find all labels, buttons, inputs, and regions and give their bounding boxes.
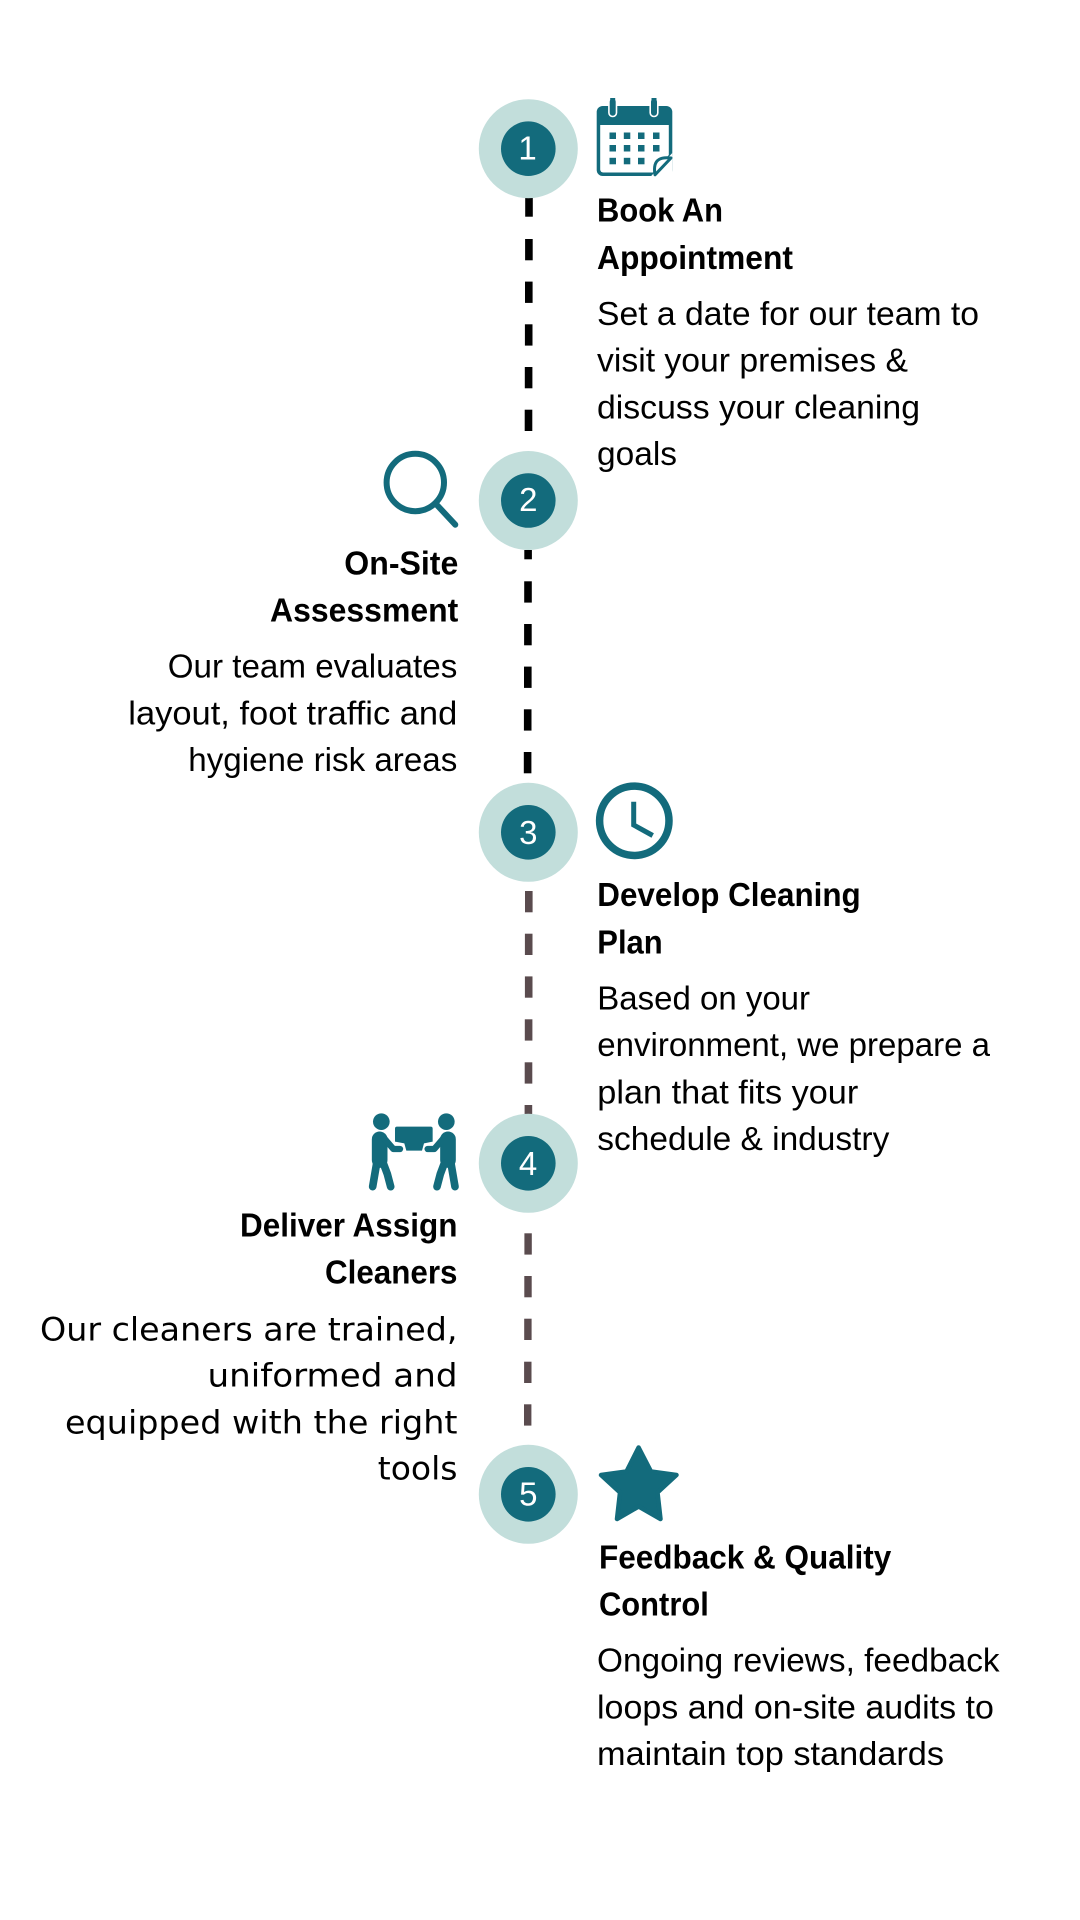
step 1 heading: [597, 192, 793, 276]
step 3 description: environment, we prepare a: [597, 1027, 990, 1064]
step 3 description: schedule & industry: [597, 1121, 890, 1158]
step 3 description: [597, 980, 990, 1158]
step 5 number badge: 5: [519, 1476, 537, 1513]
step 5 description: loops and on-site audits to: [597, 1689, 994, 1726]
step 3 description: Based on your: [597, 980, 810, 1017]
step 4 description: uniformed and: [208, 1357, 458, 1395]
step 5 description: [597, 1643, 1000, 1773]
step 2 heading: Assessment: [270, 592, 458, 629]
step 1 number badge: 1: [518, 130, 537, 166]
step 2 description: layout, foot traffic and: [128, 695, 457, 732]
step 4 description: equipped with the right: [65, 1403, 458, 1441]
icon: magnifying glass: [387, 454, 455, 525]
step 2 heading: [270, 544, 458, 629]
icon: calendar: [597, 98, 672, 176]
icon: clock: [600, 786, 669, 856]
dashed connector: step 3 to 4: [525, 891, 533, 1115]
step 1 heading: Appointment: [597, 239, 793, 276]
step 3 number badge: [479, 783, 578, 882]
step 3 heading: Plan: [597, 923, 663, 960]
step 2 number badge: 2: [519, 481, 537, 518]
step 4 heading: Deliver Assign: [240, 1207, 458, 1244]
icon: two people carrying box: [373, 1113, 455, 1187]
step 4 description: [40, 1311, 458, 1487]
step 4 number badge: 4: [519, 1145, 537, 1182]
dashed connector: step 1 to 2: [525, 198, 533, 431]
step 3 description: plan that fits your: [597, 1074, 858, 1111]
step 2 description: hygiene risk areas: [188, 742, 457, 779]
step 1 number badge: [479, 99, 578, 198]
step 5 heading: Feedback & Quality: [599, 1538, 892, 1575]
step 4 heading: Cleaners: [325, 1253, 458, 1290]
step 5 heading: [599, 1538, 892, 1623]
step 5 description: maintain top standards: [597, 1736, 944, 1773]
step 3 heading: [597, 876, 861, 960]
step 1 description: Set a date for our team to: [597, 296, 979, 333]
step 1 description: [597, 296, 979, 473]
step 2 description: Our team evaluates: [168, 649, 457, 686]
step 1 description: visit your premises &: [597, 343, 908, 380]
step 5 number badge: [479, 1445, 578, 1544]
dashed connector: step 2 to 3: [524, 550, 532, 773]
step 1 heading: Book An: [597, 192, 723, 229]
step 3 number badge: 3: [519, 814, 537, 851]
step 4 description: Our cleaners are trained,: [40, 1311, 458, 1349]
dashed connector: step 4 to 5: [524, 1233, 532, 1426]
step 3 heading: Develop Cleaning: [597, 876, 861, 913]
step 2 description: [128, 649, 457, 779]
step 4 number badge: [479, 1114, 578, 1213]
step 2 number badge: [479, 451, 578, 550]
icon: star: [601, 1448, 676, 1519]
step 1 description: discuss your cleaning: [597, 389, 920, 426]
step 4 heading: [240, 1207, 458, 1290]
step 5 description: Ongoing reviews, feedback: [597, 1643, 1000, 1680]
step 2 heading: On-Site: [344, 544, 458, 581]
step 5 heading: Control: [599, 1586, 709, 1623]
step 1 description: goals: [597, 436, 677, 473]
step 4 description: tools: [378, 1449, 458, 1487]
